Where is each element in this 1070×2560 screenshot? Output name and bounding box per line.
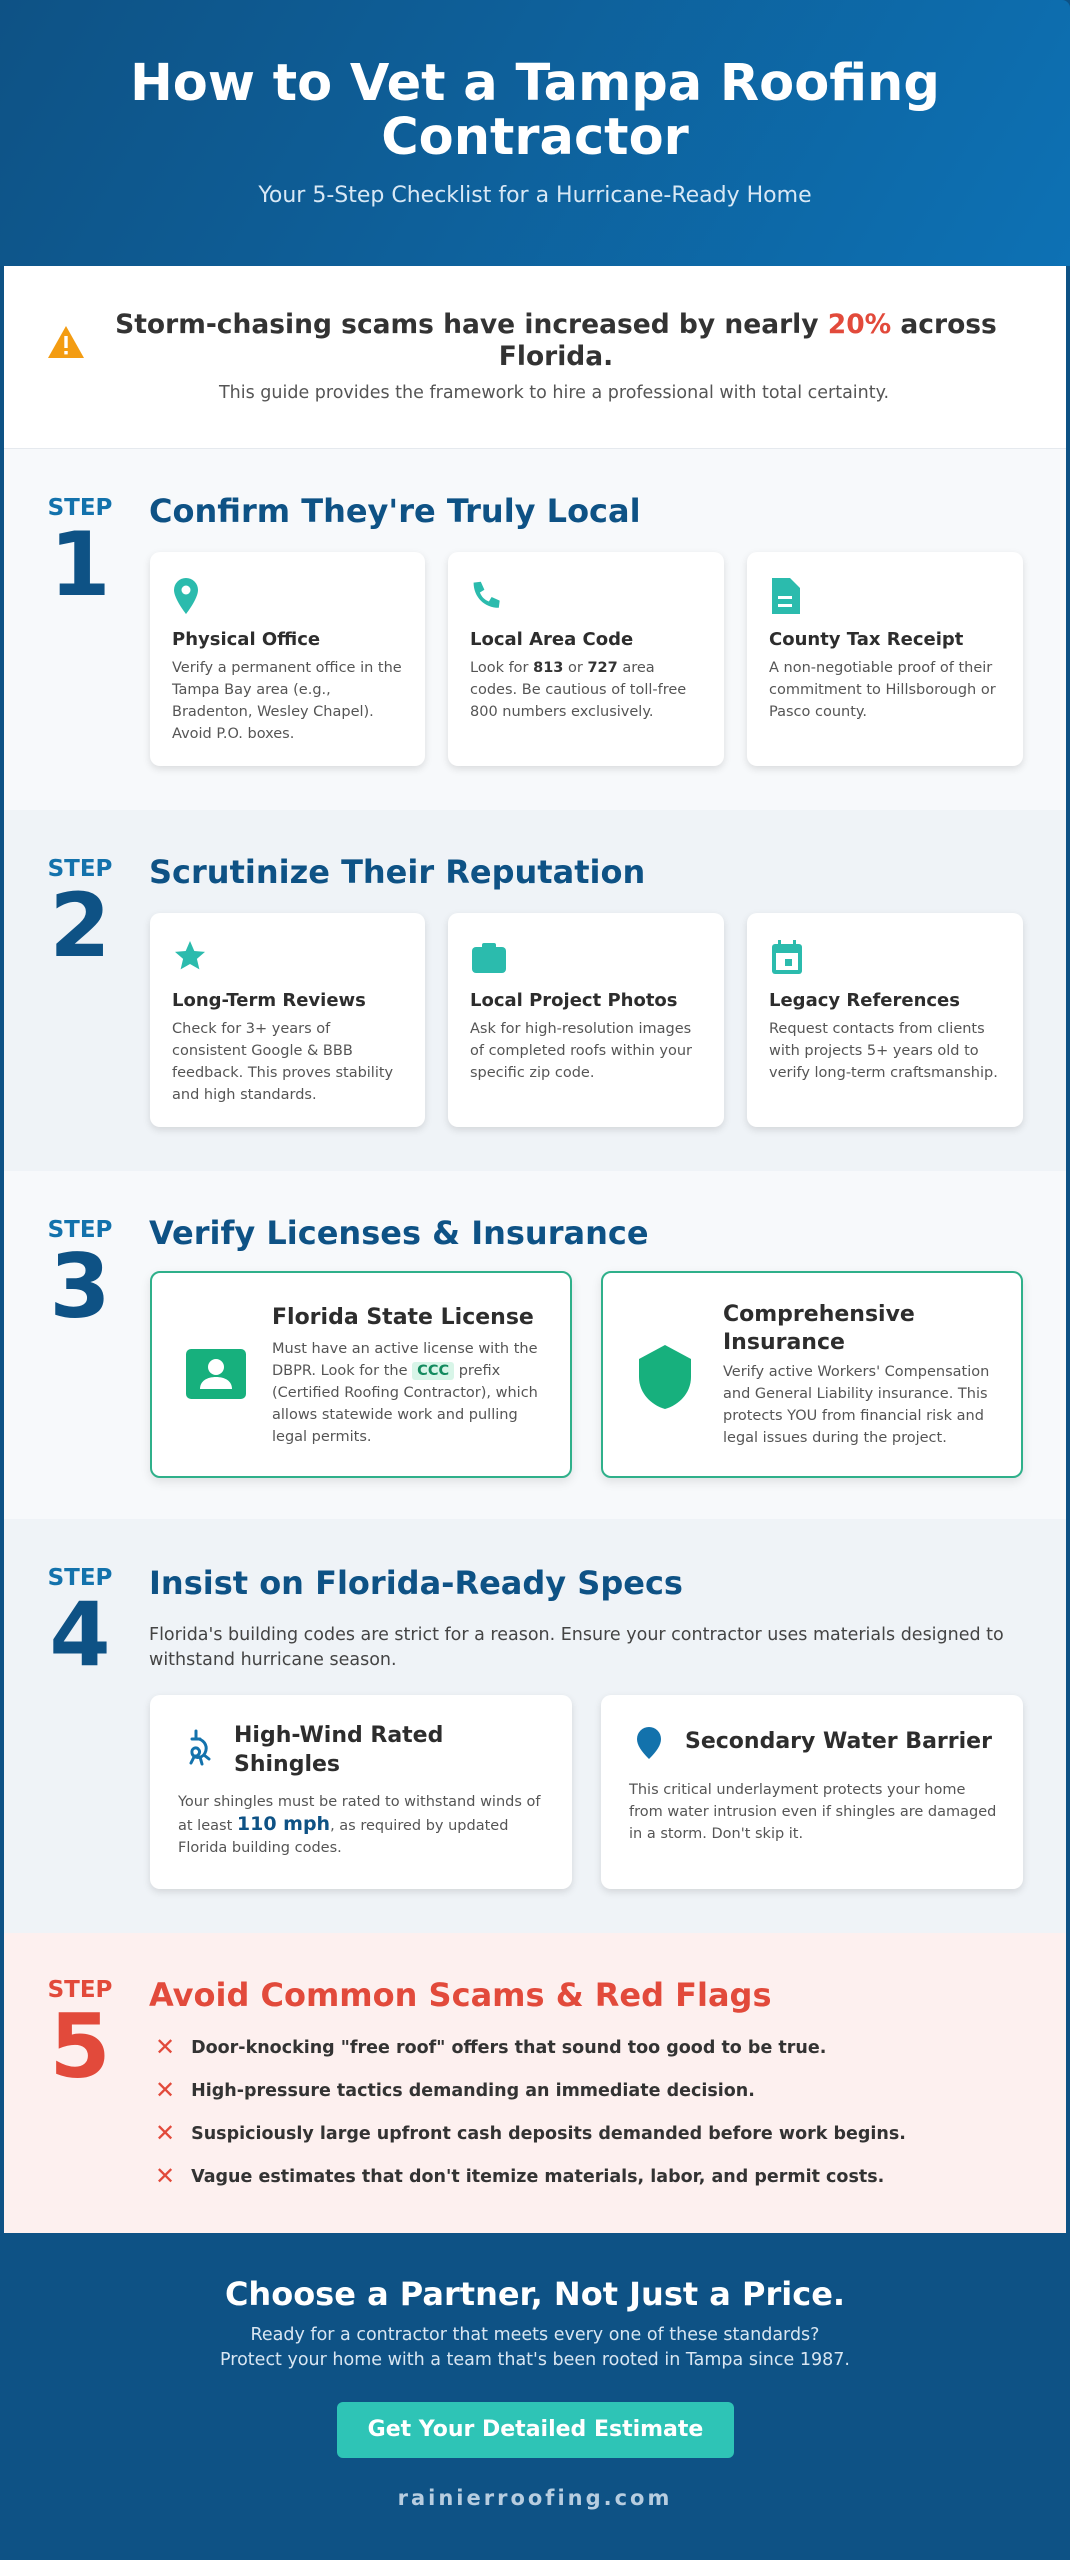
icon: pin [174,578,198,614]
title: Contractor [381,108,689,167]
card: insurance [601,1271,1023,1478]
icon: wind [189,1730,211,1766]
red flag list: ✕ Vague estimates that don't itemize materials, labor, and permit costs. [155,2162,884,2190]
icon: shield [639,1345,691,1409]
card: water barrier [601,1695,1023,1889]
button [337,2402,734,2458]
intro text: Florida's building codes are strict for a reason. Ensure your contractor uses materials designed to withstand hurricane season. [149,1625,1004,1670]
card: state license: Must have an active license with the DBPR. Look for the CCC prefix (Certified Roofing Contractor), which allows statewide work and pulling legal permits. [272,1341,538,1445]
step number: 1 [49,513,111,616]
card: reviews [150,913,425,1127]
heading: Scrutinize Their Reputation [149,853,645,891]
card: shingles: High-Wind Rated Shingles [234,1723,443,1777]
step 3 [4,1171,1066,1519]
card: references: Request contacts from clients with projects 5+ years old to verify long-term craftsmanship. [769,1021,998,1081]
card: photos: Ask for high-resolution images of completed roofs within your specific zip code. [470,1021,692,1081]
card: references [747,913,1023,1127]
step number: STEP [48,495,112,521]
step number: 3 [49,1235,111,1338]
icon: star [175,941,205,970]
step number: 5 [49,1995,111,2098]
heading: Avoid Common Scams & Red Flags [149,1976,772,2014]
red flag list: ✕ Door-knocking "free roof" offers that sound too good to be true. [155,2033,826,2061]
warning banner [4,266,1066,449]
footer [0,2233,1070,2560]
card: tax receipt: County Tax Receipt [769,629,963,650]
red flag list: ✕ High-pressure tactics demanding an immediate decision. [155,2076,755,2104]
icon: camera [472,943,506,973]
card: area code: Local Area Code [470,629,633,650]
icon: phone [474,582,500,608]
card: shingles: Your shingles must be rated to withstand winds of at least 110 mph, as required by updated Florida building codes. [178,1794,540,1856]
card: water barrier: This critical underlayment protects your home from water intrusion even if shingles are damaged in a storm. Don't skip it. [629,1782,996,1842]
title: How to Vet a Tampa Roofing [130,54,940,113]
card: insurance: Comprehensive Insurance [723,1302,915,1355]
card: insurance: Verify active Workers' Compensation and General Liability insurance. This protects YOU from financial risk and legal issues during the project. [723,1364,989,1446]
footer heading: Choose a Partner, Not Just a Price. [225,2275,845,2313]
card: reviews: Long-Term Reviews [172,990,366,1011]
card: physical office [150,552,425,766]
step number: STEP [48,856,112,882]
header [0,0,1070,266]
icon: calendar [772,940,802,974]
icon: water drop [637,1727,661,1759]
headline: Storm-chasing scams have increased by nearly 20% across Florida. [115,309,997,372]
icon: document [772,578,800,614]
card: state license [150,1271,572,1478]
heading: Insist on Florida-Ready Specs [149,1564,683,1602]
card: tax receipt: A non-negotiable proof of their commitment to Hillsborough or Pasco county. [769,660,996,720]
red flag list: ✕ Suspiciously large upfront cash deposits demanded before work begins. [155,2119,906,2147]
card: physical office: Physical Office [172,629,320,650]
card: water barrier: Secondary Water Barrier [685,1729,992,1754]
step number: STEP [48,1977,112,2003]
step number: 4 [49,1583,111,1686]
step 5 [4,1933,1066,2233]
card: photos: Local Project Photos [470,990,678,1011]
footer text [220,2325,850,2370]
card: area code [448,552,724,766]
icon: warning [48,326,84,358]
card: physical office: Verify a permanent office in the Tampa Bay area (e.g., Bradenton, Wesley Chapel). Avoid P.O. boxes. [172,660,402,742]
step 1 [4,449,1066,810]
heading: Confirm They're Truly Local [149,492,641,530]
heading: Verify Licenses & Insurance [149,1214,649,1252]
subtitle: Your 5-Step Checklist for a Hurricane-Ready Home [258,183,812,208]
icon: id badge [186,1349,246,1399]
footer text: Protect your home with a team that's been rooted in Tampa since 1987. [220,2350,850,2370]
title [130,54,940,167]
card: shingles [150,1695,572,1889]
card: references: Legacy References [769,990,960,1011]
step 2 [4,810,1066,1171]
step 4 [4,1519,1066,1933]
card: tax receipt [747,552,1023,766]
card: reviews: Check for 3+ years of consistent Google & BBB feedback. This proves stability and high standards. [172,1021,393,1103]
website: rainierroofing.com [398,2486,672,2510]
subline: This guide provides the framework to hire a professional with total certainty. [219,383,889,403]
red flag list [155,2033,906,2190]
card: photos [448,913,724,1127]
step number: STEP [48,1565,112,1591]
footer text: Ready for a contractor that meets every one of these standards? [251,2325,819,2345]
step number: STEP [48,1217,112,1243]
button: Get Your Detailed Estimate [368,2417,703,2442]
card: area code: Look for 813 or 727 area codes. Be cautious of toll-free 800 numbers exclusively. [470,660,686,720]
card: state license: Florida State License [272,1305,534,1330]
step number: 2 [49,874,111,977]
